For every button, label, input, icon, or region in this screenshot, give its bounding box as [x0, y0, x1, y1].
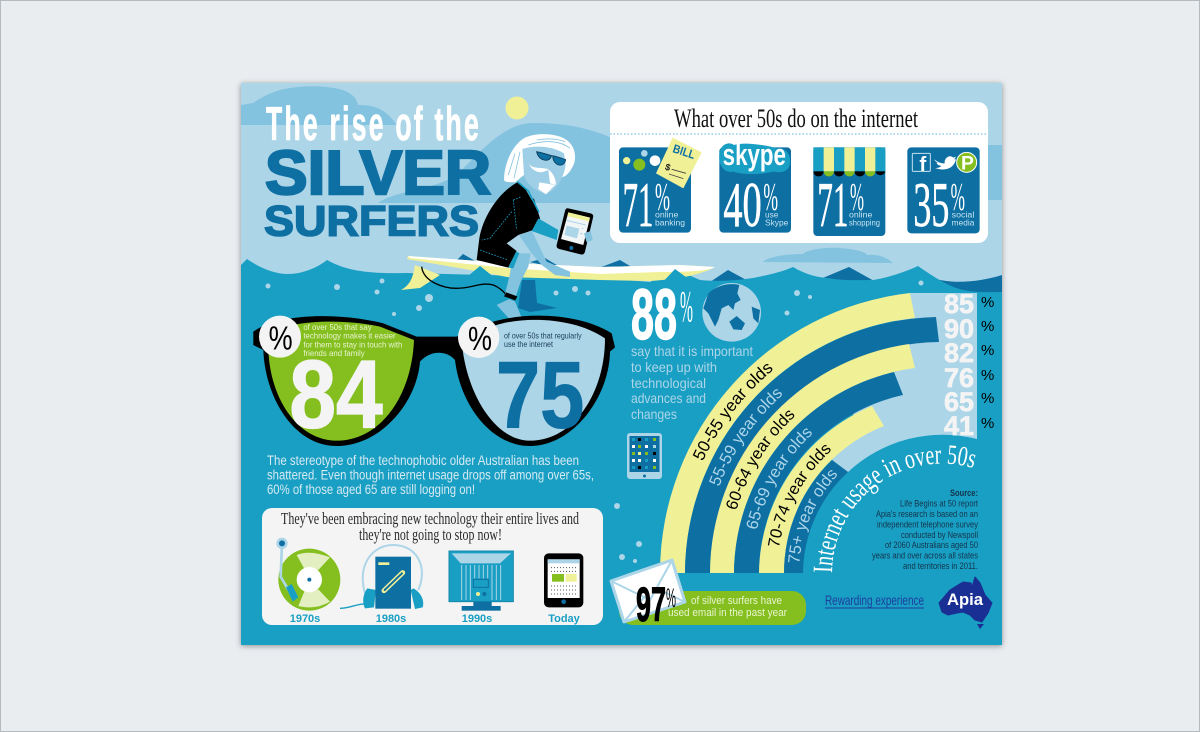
card: skype: Skype	[765, 219, 789, 228]
percent signs: %	[981, 294, 994, 311]
card: skype	[719, 138, 791, 240]
icon: facebook: f	[919, 153, 926, 176]
timeline labels: 1970s	[290, 613, 320, 625]
text right lens: of over 50s that regularly	[504, 332, 582, 341]
card: social media: social	[952, 211, 975, 220]
shorts cuff	[508, 252, 519, 268]
card: social media	[907, 147, 980, 240]
card: online shopping: 71	[817, 170, 848, 240]
card: online shopping: %	[850, 174, 864, 218]
title: The rise of the: The rise of the	[266, 97, 481, 150]
right lens	[462, 320, 605, 441]
callout: 97 percent email: %	[666, 583, 676, 613]
timeline heading: They've been embracing new technology their entire lives and	[281, 509, 579, 528]
infographic panel	[241, 83, 1002, 645]
left lens	[268, 322, 414, 441]
callout: 97 percent email: of silver surfers have	[691, 595, 782, 607]
surfer figure	[422, 134, 593, 325]
callout: 97 percent email: 97	[636, 579, 666, 632]
icon: globe	[702, 283, 761, 342]
text left lens: for them to stay in touch with	[303, 339, 403, 349]
stat: 88 percent: %	[680, 282, 693, 331]
values: 82	[944, 338, 974, 368]
icon: small tablet	[627, 433, 662, 479]
wetsuit stitching	[480, 197, 522, 260]
card: online banking: 71	[623, 170, 653, 240]
surfboard fin	[401, 265, 440, 290]
icon: tablet today	[544, 553, 583, 607]
card: skype: use	[765, 211, 779, 220]
source note: Apia's research is based on an	[876, 509, 978, 519]
band 50-55	[660, 293, 915, 573]
cloud: hill behind surfer	[378, 123, 1002, 203]
hand	[584, 231, 593, 242]
card: online banking: banking	[655, 219, 685, 228]
icon: shop awning	[813, 147, 885, 176]
sea	[241, 259, 1002, 310]
card: skype: %	[763, 174, 778, 218]
panel: what over 50s do on the internet	[610, 102, 988, 243]
card: online shopping	[813, 147, 885, 240]
dark waves behind	[458, 254, 1002, 292]
icon: bill note: BILL	[671, 142, 697, 162]
callout: 97 percent email: used email in the past year	[668, 607, 787, 619]
timeline heading: they're not going to stop now!	[359, 525, 502, 544]
stat: 88 percent: changes	[631, 406, 677, 422]
percent badge left	[259, 316, 301, 358]
icon: skype logo: skype	[723, 138, 786, 172]
hair	[504, 134, 575, 182]
timeline labels	[290, 613, 581, 625]
beard and moustache	[528, 163, 556, 194]
chart title: internet usage in over 50s: Internet usage in over 50s	[814, 445, 976, 572]
icon: bill note	[656, 138, 702, 188]
title: SILVER: SILVER	[265, 139, 491, 208]
band 70-74	[759, 406, 884, 573]
bubbles	[266, 278, 924, 563]
stat: 88 percent: advances and	[631, 390, 706, 406]
text left lens: technology makes it easier	[303, 331, 396, 341]
values: 41	[944, 411, 974, 441]
timeline labels: 1990s	[462, 613, 492, 625]
stat 75: 75	[496, 342, 584, 448]
source note: Source:	[950, 488, 978, 498]
band labels: 70-74 year olds	[768, 445, 831, 546]
band 55-59	[685, 317, 939, 573]
card: online banking: %	[655, 174, 670, 218]
percent badge left: %	[269, 320, 293, 357]
near arm	[519, 230, 570, 277]
paragraph: stereotype: 60% of those aged 65 are still logging on!	[267, 482, 475, 497]
far leg	[518, 280, 557, 312]
percent signs: %	[981, 415, 994, 432]
tablet held	[557, 208, 593, 255]
sunglasses	[537, 152, 566, 165]
card: social media: media	[952, 219, 975, 228]
source note: conducted by Newspoll	[901, 530, 978, 540]
sunglasses chart: 84 and 75	[253, 316, 615, 448]
chart: internet usage rainbow	[660, 289, 994, 573]
near leg	[505, 253, 531, 299]
band labels: 50-55 year olds	[692, 364, 772, 460]
text right lens	[504, 332, 582, 349]
icon: bill note: $	[664, 162, 673, 173]
percent signs	[981, 294, 994, 432]
timeline heading	[281, 509, 579, 544]
source note: independent telephone survey	[877, 520, 979, 530]
source note: and territories in 2011.	[903, 561, 978, 571]
sky background	[241, 83, 1002, 283]
icon: walkman and headphones	[340, 545, 423, 609]
sun	[506, 96, 528, 120]
light backing	[832, 293, 977, 472]
stat: 88 percent: say that it is important	[631, 343, 753, 359]
values: 90	[944, 314, 974, 344]
text left lens: friends and family	[303, 348, 365, 358]
forearm sleeve	[532, 218, 558, 240]
link: rewarding experience: Rewarding experience	[825, 592, 924, 608]
icon: record player	[276, 538, 340, 611]
leash	[422, 267, 507, 295]
card: online banking	[619, 138, 702, 240]
stat: 88 percent: to keep up with	[631, 359, 717, 375]
stat: 88 percent	[631, 276, 753, 422]
percent badge right	[458, 317, 499, 358]
band labels: 60-64 year olds	[726, 410, 794, 509]
icon: monitor	[449, 551, 513, 611]
cloud: top left	[241, 86, 397, 125]
icon: envelope	[611, 560, 685, 622]
timeline labels: 1980s	[376, 613, 406, 625]
values: 85	[944, 289, 974, 319]
paragraph: stereotype: The stereotype of the technophobic older Australian has been	[267, 453, 579, 468]
icon: pinterest: P	[961, 153, 974, 174]
title: SURFERS: SURFERS	[264, 198, 479, 246]
percent signs: %	[981, 367, 994, 384]
text left lens: of over 50s that say	[303, 322, 372, 332]
band 60-64	[710, 344, 915, 573]
values: 76	[944, 363, 974, 393]
stat: 88 percent: 88	[631, 276, 677, 355]
text left lens	[303, 322, 403, 358]
neck	[526, 188, 534, 200]
card: online shopping: online	[849, 211, 873, 220]
torso	[477, 182, 540, 268]
band labels: 75+ year olds	[788, 470, 837, 562]
glasses frame	[253, 316, 615, 446]
timeline labels: Today	[548, 613, 581, 625]
values: 65	[944, 387, 974, 417]
paragraph: stereotype: shattered. Even though internet usage drops off among over 65s,	[267, 468, 594, 482]
hair lines	[508, 139, 570, 178]
source note: Life Begins at 50 report	[900, 498, 978, 508]
logo: Apia: Apia	[947, 590, 984, 609]
card: online banking: online	[655, 211, 679, 220]
heading: What over 50s do on the internet	[674, 104, 919, 133]
card: social media: 35	[913, 170, 949, 240]
source note: years and over across all states	[872, 550, 979, 560]
percent signs: %	[981, 318, 994, 335]
card: social media: %	[951, 174, 965, 218]
icon: twitter bird	[934, 156, 956, 169]
callout: 97 percent email	[611, 560, 806, 632]
logo: Apia	[939, 577, 992, 629]
card: skype: 40	[723, 170, 762, 240]
panel: technology timeline	[262, 508, 603, 625]
cloud: small right	[763, 248, 893, 263]
source note: of 2060 Australians aged 50	[885, 540, 978, 550]
percent signs: %	[981, 342, 994, 359]
band labels: 55-59 year olds	[709, 389, 782, 486]
source note	[872, 488, 979, 571]
paragraph: stereotype	[267, 453, 594, 497]
text right lens: use the internet	[504, 340, 554, 349]
band 75+	[784, 460, 848, 573]
surfboard	[407, 256, 715, 281]
stat 84: 84	[289, 340, 383, 448]
percent signs: %	[981, 390, 994, 407]
face	[522, 147, 566, 194]
stat: 88 percent: technological	[631, 375, 706, 391]
band labels	[692, 364, 837, 562]
band 65-69	[734, 372, 903, 573]
band labels: 65-69 year olds	[746, 428, 812, 529]
card: online shopping: shopping	[849, 219, 880, 228]
values	[944, 289, 974, 441]
percent badge right: %	[468, 321, 492, 358]
